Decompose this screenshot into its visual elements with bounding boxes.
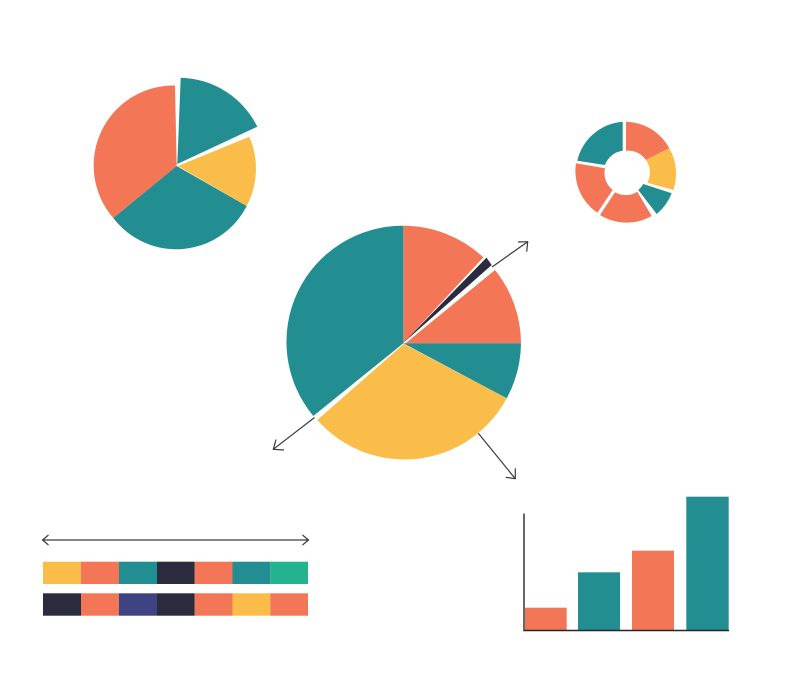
slice: yellow	[178, 137, 256, 206]
colour strip: top row	[43, 562, 308, 584]
slice: orange right	[406, 270, 521, 343]
slice: yellow	[317, 344, 507, 459]
arrow: diagonal lower left	[273, 418, 314, 450]
arrow: horizontal double-headed	[42, 535, 308, 545]
segment: orange bottom	[600, 192, 652, 223]
pie chart: large centre	[286, 226, 521, 459]
segment: yellow	[646, 148, 676, 190]
segment: teal top left	[577, 122, 623, 165]
arrow: lower right	[478, 433, 515, 479]
pie chart: exploded slice, top left	[94, 78, 257, 249]
slice: teal bottom	[113, 166, 247, 249]
bar 3	[632, 551, 674, 630]
bar 4	[686, 497, 729, 630]
slice: orange upper	[403, 226, 483, 343]
slice: navy sliver	[404, 258, 492, 343]
bar 2	[578, 572, 620, 630]
donut chart: top right	[575, 122, 676, 223]
slice: teal left	[286, 226, 403, 416]
bar chart	[524, 497, 729, 630]
axes	[524, 514, 729, 630]
segment: orange top	[626, 122, 669, 160]
arrow: diagonal upper right	[492, 242, 528, 267]
slice: teal right	[403, 343, 521, 398]
bar 1	[525, 608, 567, 630]
segment: teal small	[638, 184, 672, 214]
colour strip: bottom row	[43, 593, 308, 616]
slice: exploded teal	[177, 78, 257, 164]
segment: orange left	[575, 163, 613, 213]
slice: orange	[94, 85, 177, 218]
